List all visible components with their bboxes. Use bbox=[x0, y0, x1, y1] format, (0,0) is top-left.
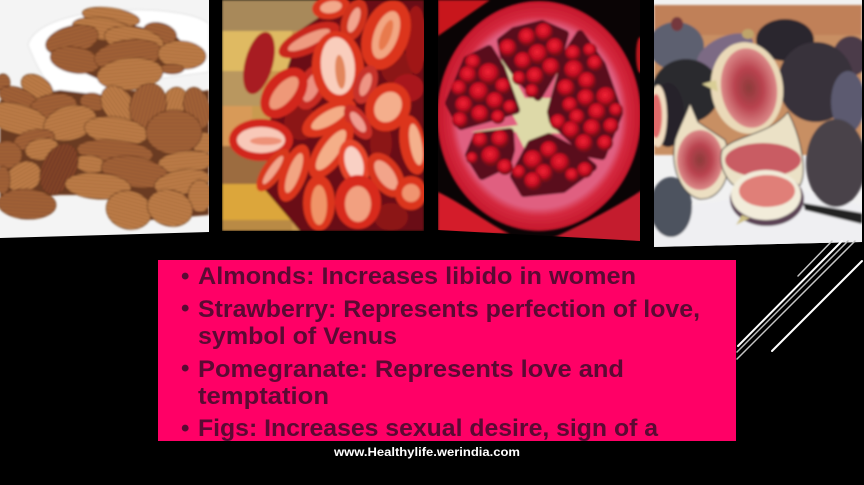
dark red backdrop bbox=[265, 0, 424, 231]
white surface bbox=[654, 190, 862, 247]
bullet list: • bbox=[181, 355, 189, 382]
bullet list: • bbox=[181, 263, 189, 290]
bullet list: Strawberry: Represents perfection of love, bbox=[198, 296, 700, 323]
decorative diagonal lines bbox=[737, 241, 862, 359]
bullet list: Pomegranate: Represents love and bbox=[198, 356, 624, 383]
wooden board bbox=[222, 0, 320, 231]
bullet list bbox=[181, 263, 700, 442]
bullet list: • bbox=[181, 295, 189, 322]
photo: pomegranate bbox=[437, 0, 644, 243]
photo: almonds bbox=[0, 0, 215, 238]
bullet list: • bbox=[181, 415, 189, 442]
fruit rind bbox=[437, 1, 641, 231]
bullet list: Almonds: Increases libido in women bbox=[198, 263, 636, 290]
pith star bbox=[471, 57, 562, 150]
knife bbox=[803, 203, 862, 224]
cut fig front bbox=[730, 170, 804, 226]
aril cluster backgrounds bbox=[449, 24, 619, 193]
background pomegranate halves bbox=[438, 0, 490, 36]
bullet list: symbol of Venus bbox=[198, 323, 397, 350]
cut fig center bbox=[721, 112, 803, 195]
white bowl bbox=[28, 10, 209, 100]
whole figs bbox=[648, 22, 704, 70]
strawberry slices bbox=[229, 0, 431, 231]
left cut fig bbox=[654, 83, 669, 148]
dark whole berries bbox=[237, 6, 427, 231]
footer website text: www.Healthylife.werindia.com bbox=[333, 445, 520, 459]
cut fig left bbox=[674, 103, 729, 199]
photo: figs bbox=[648, 0, 864, 247]
almonds in bowl bbox=[42, 4, 207, 93]
panel: pink text box bbox=[158, 260, 736, 442]
wooden table bbox=[654, 34, 862, 156]
bullet list: Figs: Increases sexual desire, sign of a bbox=[198, 415, 659, 442]
cut fig top bbox=[702, 29, 789, 139]
arils bbox=[451, 23, 623, 190]
loose almonds bbox=[0, 69, 215, 234]
photo: strawberries bbox=[222, 0, 431, 231]
bullet list: temptation bbox=[198, 383, 329, 410]
dark gaps beneath the pile bbox=[85, 24, 182, 80]
